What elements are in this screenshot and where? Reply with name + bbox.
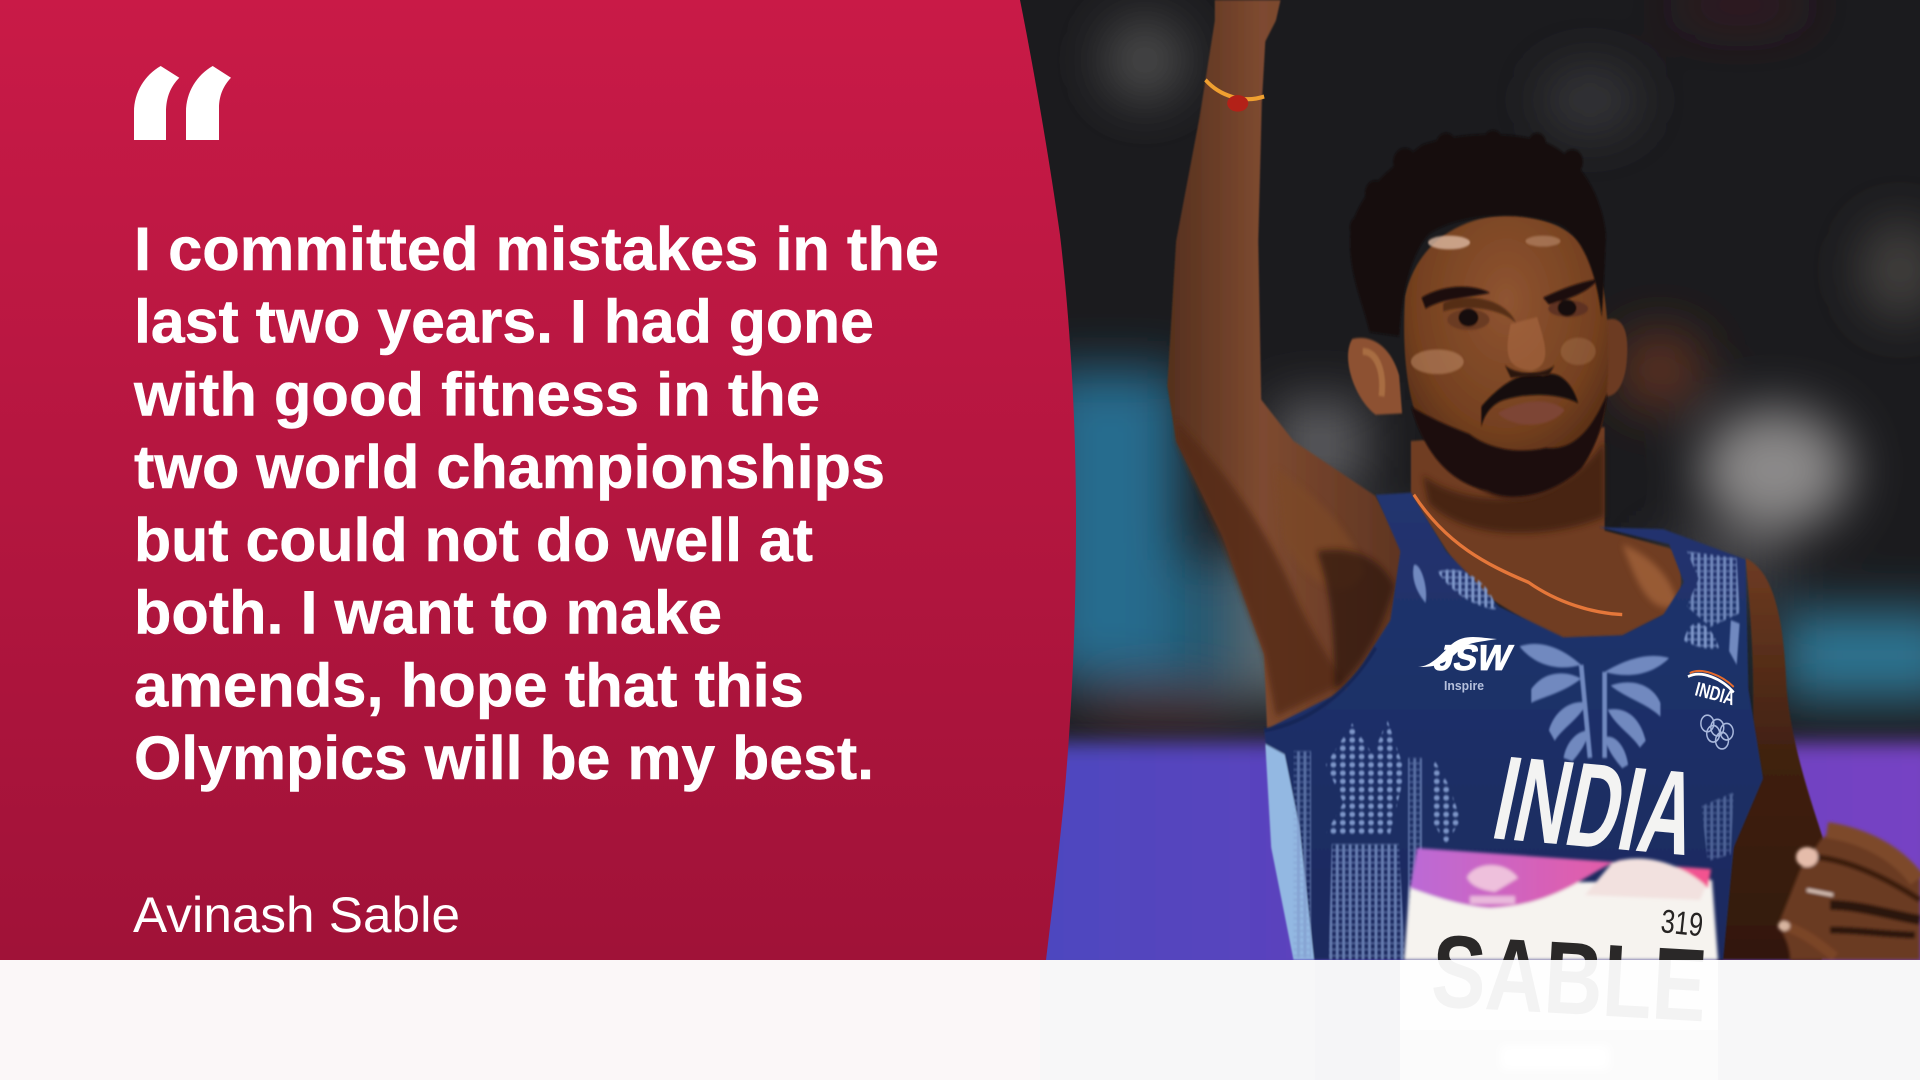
athlete: forehead sweat highlights xyxy=(1411,236,1596,374)
quote text: last two years. I had gone xyxy=(134,288,874,356)
athlete: raised arm xyxy=(1167,0,1405,730)
quote text: I committed mistakes in the xyxy=(134,215,939,283)
vest: INDIA lettering: INDIA xyxy=(1484,731,1709,881)
race bib xyxy=(1404,848,1718,960)
athlete: far arm xyxy=(1716,558,1828,960)
photo: athlete figure xyxy=(1167,0,1920,1043)
athlete: wrist band xyxy=(1205,80,1264,112)
quote text: with good fitness in the xyxy=(133,360,820,428)
quote text: both. I want to make xyxy=(134,579,722,647)
vest: JSW sponsor logo: Inspire xyxy=(1444,678,1484,693)
bottom strip with faded photo: SABLE xyxy=(1429,913,1710,1043)
athlete: vest xyxy=(1264,493,1763,960)
quote text: two world championships xyxy=(134,433,885,501)
quote text: amends, hope that this xyxy=(134,651,804,719)
bib: SABLE name: SABLE xyxy=(1429,913,1710,1043)
vest: printed pattern xyxy=(1294,551,1740,960)
quote text: but could not do well at xyxy=(134,506,813,574)
athlete: ears xyxy=(1348,319,1627,415)
panel: red quote panel xyxy=(0,0,1076,960)
vest: olympic team flag xyxy=(1688,671,1734,692)
athlete: brows and eyes xyxy=(1421,279,1598,378)
athlete: face xyxy=(1404,215,1609,502)
quote text xyxy=(133,215,939,792)
vest: olympic rings xyxy=(1701,715,1733,749)
attribution: Avinash Sable xyxy=(133,887,460,943)
athlete: necklace xyxy=(1414,495,1622,615)
athlete: hair xyxy=(1350,130,1606,336)
vest: JSW sponsor logo xyxy=(1418,637,1517,693)
bottom strip with faded photo xyxy=(0,913,1920,1080)
athlete: near hand xyxy=(1778,830,1920,960)
bib: number 319: 319 xyxy=(1659,902,1705,943)
icon: quotation mark xyxy=(134,66,231,140)
athlete: beard and facial hair xyxy=(1411,374,1608,497)
quote text: Olympics will be my best. xyxy=(134,724,874,792)
vest: JSW sponsor logo: JSW xyxy=(1430,638,1517,678)
athlete: neck and chest xyxy=(1411,427,1681,641)
photo: blurred stadium background xyxy=(1020,0,1920,960)
vest: small INDIA label: INDIA xyxy=(1693,679,1737,710)
